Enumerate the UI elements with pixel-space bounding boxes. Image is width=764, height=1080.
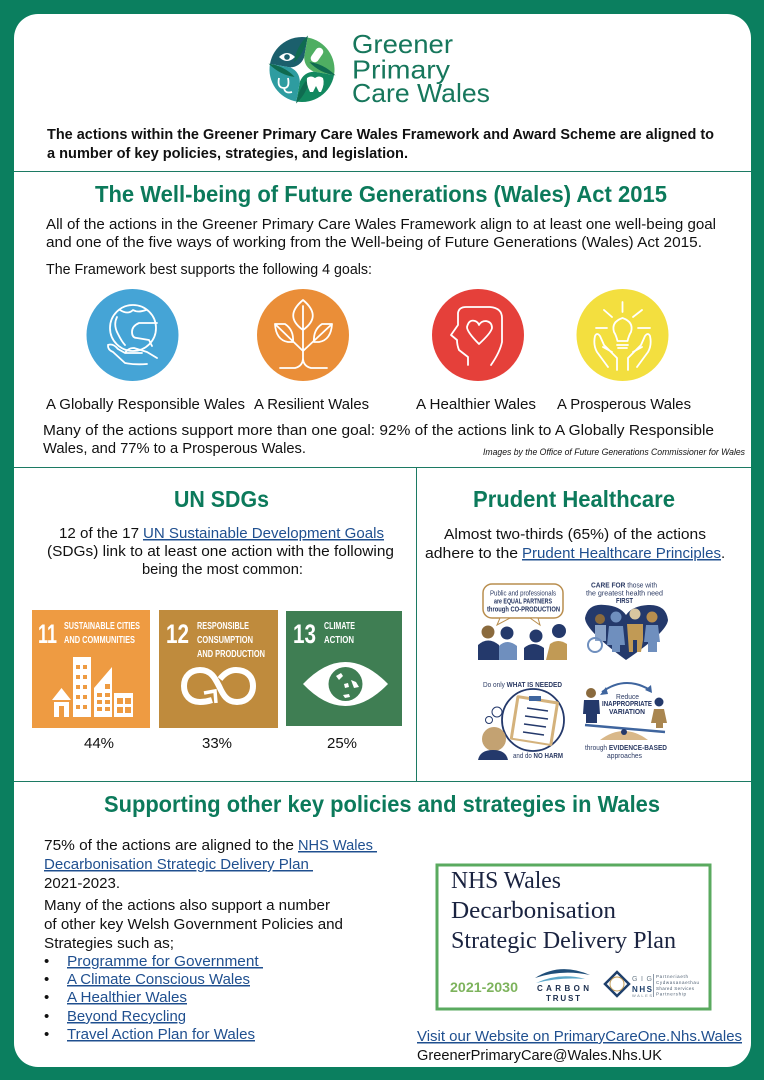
card: NHS Wales Decarbonisation Strategic Delivery Plan: 2021-2030 [450, 979, 518, 995]
panel: UN SDGs [32, 486, 402, 752]
illustration: reduce variation: through EVIDENCE-BASED [585, 745, 667, 752]
contact details: Visit our Website on PrimaryCareOne.Nhs.Wales [417, 1028, 742, 1045]
card: NHS Wales Decarbonisation Strategic Delivery Plan: Decarbonisation [451, 898, 616, 924]
text: decarbonisation alignment [44, 837, 377, 952]
SDG percentages: 33% [202, 735, 232, 752]
tile: SDG 13: 13 [293, 619, 316, 649]
tile: SDG 13: ACTION [324, 634, 354, 646]
list: policies: Beyond Recycling [67, 1008, 186, 1025]
tile: SDG 12 [159, 610, 278, 728]
heading: other key policies: Supporting other key policies and strategies in Wales [104, 791, 660, 817]
logo: NHS Wales Shared Services Partnership: Partnership [656, 992, 686, 996]
contact details: GreenerPrimaryCare@Wales.Nhs.UK [417, 1047, 662, 1064]
list: policies: Programme for Government [67, 953, 263, 970]
illustration: reduce variation [583, 683, 667, 760]
card: NHS Wales Decarbonisation Strategic Delivery Plan [437, 865, 710, 1009]
panel: other key policies [44, 791, 742, 1064]
text: goal percentages: Wales, and 77% to a Prosperous Wales. [43, 440, 306, 457]
tile: SDG 12: AND PRODUCTION [197, 648, 265, 660]
text: goal percentages [43, 422, 714, 457]
text: framework alignment [46, 216, 716, 278]
tile: SDG 12: RESPONSIBLE [197, 620, 249, 632]
SDG percentages [84, 735, 357, 752]
list: policies: Travel Action Plan for Wales [67, 1026, 255, 1043]
text: framework alignment: The Framework best supports the following 4 goals: [46, 261, 372, 278]
tile: SDG 13 [286, 611, 402, 726]
illustration: co-production: Public and professionals [490, 590, 556, 598]
SDG percentages: 44% [84, 735, 114, 752]
text: SDG summary: being the most common: [142, 561, 303, 578]
list: policies: • [44, 989, 49, 1006]
text: framework alignment: and one of the five ways of working from the Well-being of Future Generations (Wales) Act 2015. [46, 234, 702, 251]
tile: SDG 12: 12 [166, 619, 189, 649]
illustration: co-production: are EQUAL PARTNERS [494, 598, 552, 606]
illustration: co-production: through CO-PRODUCTION [487, 606, 560, 614]
text: SDG summary: UN Sustainable Development Goals [143, 525, 384, 542]
icon: light bulb in hands [576, 289, 668, 381]
text: prudent summary: Almost two-thirds (65%) of the actions [444, 526, 706, 543]
logo: NHS Wales Shared Services Partnership: GIG [632, 976, 652, 983]
illustration: reduce variation: VARIATION [609, 709, 645, 716]
heading: Prudent Healthcare: Prudent Healthcare [473, 486, 675, 512]
tile: SDG 12: CONSUMPTION [197, 634, 253, 646]
text: framework alignment: All of the actions in the Greener Primary Care Wales Framework align to at least one well-being goal [46, 216, 716, 233]
text: SDG summary: 12 of the 17 [59, 525, 139, 542]
text: prudent summary: Prudent Healthcare Principles [522, 545, 721, 562]
tile: SDG 11: SUSTAINABLE CITIES [64, 620, 140, 632]
logo: Carbon Trust: TRUST [546, 994, 580, 1003]
logo wordmark: Greener [352, 29, 453, 59]
goal labels: A Prosperous Wales [557, 396, 691, 413]
list: policies: • [44, 1026, 49, 1043]
illustration: do no harm: Do only WHAT IS NEEDED [483, 682, 562, 689]
goal labels: A Healthier Wales [416, 396, 536, 413]
logo: NHS Wales Shared Services Partnership: Shared Services [656, 986, 695, 991]
illustration: care for those in need [585, 582, 668, 660]
illustration: care for those in need: the greatest health need [586, 590, 663, 598]
goal labels [46, 396, 691, 413]
text: decarbonisation alignment: of other key Welsh Government Policies and [44, 916, 343, 933]
heading: Well-being Act: The Well-being of Future Generations (Wales) Act 2015 [95, 181, 667, 207]
card: NHS Wales Decarbonisation Strategic Delivery Plan: Strategic Delivery Plan [451, 928, 676, 954]
card: NHS Wales Decarbonisation Strategic Delivery Plan: NHS Wales [451, 868, 561, 894]
text: goal percentages: Many of the actions support more than one goal: 92% of the actions link to A Globally Responsible [43, 422, 714, 439]
panel: Well-being of Future Generations Act [43, 181, 745, 457]
tile: SDG 11: AND COMMUNITIES [64, 634, 135, 646]
illustration: care for those in need: CARE FOR those with [591, 582, 657, 590]
text: SDG summary: (SDGs) link to at least one action with the following [47, 543, 394, 560]
text: decarbonisation alignment: Decarbonisation Strategic Delivery Plan [44, 856, 313, 873]
logo: NHS Wales Shared Services Partnership [605, 972, 699, 998]
logo: Greener Primary Care Wales [263, 29, 490, 109]
illustration: co-production [478, 584, 567, 660]
SDG percentages: 25% [327, 735, 357, 752]
illustration: care for those in need: FIRST [616, 598, 634, 605]
intro statement [47, 126, 714, 162]
logo wordmark: Primary [352, 54, 450, 84]
list: policies: • [44, 1008, 49, 1025]
contact details [417, 1028, 742, 1064]
tile: SDG 11 [32, 610, 150, 728]
text: decarbonisation alignment: NHS Wales [298, 837, 377, 854]
logo: NHS Wales Shared Services Partnership: NHS [632, 985, 653, 994]
logo: Carbon Trust [535, 969, 590, 1003]
logo wordmark [352, 29, 490, 108]
logo: NHS Wales Shared Services Partnership: WALES [632, 993, 652, 998]
goal labels: A Globally Responsible Wales [46, 396, 245, 413]
text: SDG summary [47, 525, 394, 578]
text: prudent summary: adhere to the [425, 545, 518, 562]
illustration: do no harm: and do NO HARM [513, 753, 563, 760]
list: policies: A Climate Conscious Wales [67, 971, 250, 988]
list: policies: • [44, 971, 49, 988]
illustration: reduce variation: approaches [607, 753, 642, 760]
goal labels: A Resilient Wales [254, 396, 369, 413]
list: policies [44, 953, 263, 1043]
list: policies: • [44, 953, 49, 970]
logo: NHS Wales Shared Services Partnership: Partneriaeth [656, 974, 688, 979]
intro statement: The actions within the Greener Primary Care Wales Framework and Award Scheme are aligned to [47, 126, 714, 143]
list: policies: A Healthier Wales [67, 989, 187, 1006]
illustration: reduce variation: INAPPROPRIATE [602, 701, 652, 708]
text: prudent summary [425, 526, 725, 562]
icon: head with heart [432, 289, 524, 381]
text: decarbonisation alignment: 2021-2023. [44, 875, 120, 892]
image credit: Images by the Office of Future Generations Commissioner for Wales [483, 447, 745, 457]
text: decarbonisation alignment: 75% of the actions are aligned to the [44, 837, 294, 854]
text: decarbonisation alignment: Many of the actions also support a number [44, 897, 330, 914]
intro statement: a number of key policies, strategies, and legislation. [47, 145, 408, 162]
panel: Prudent Healthcare [425, 486, 725, 760]
logo: NHS Wales Shared Services Partnership: Cydwasanaethau [656, 980, 699, 985]
heading: UN SDGs: UN SDGs [174, 486, 269, 512]
illustration: do no harm [478, 682, 564, 760]
tile: SDG 13: CLIMATE [324, 620, 355, 632]
tile: SDG 11: 11 [38, 619, 57, 649]
icon: plant [257, 289, 349, 381]
text: decarbonisation alignment: Strategies such as; [44, 935, 174, 952]
icon: globe in hand [86, 289, 178, 381]
illustration: reduce variation: Reduce [616, 694, 639, 701]
logo wordmark: Care Wales [352, 78, 490, 108]
logo: Carbon Trust: CARBON [537, 984, 589, 993]
text: prudent summary: . [721, 545, 725, 562]
